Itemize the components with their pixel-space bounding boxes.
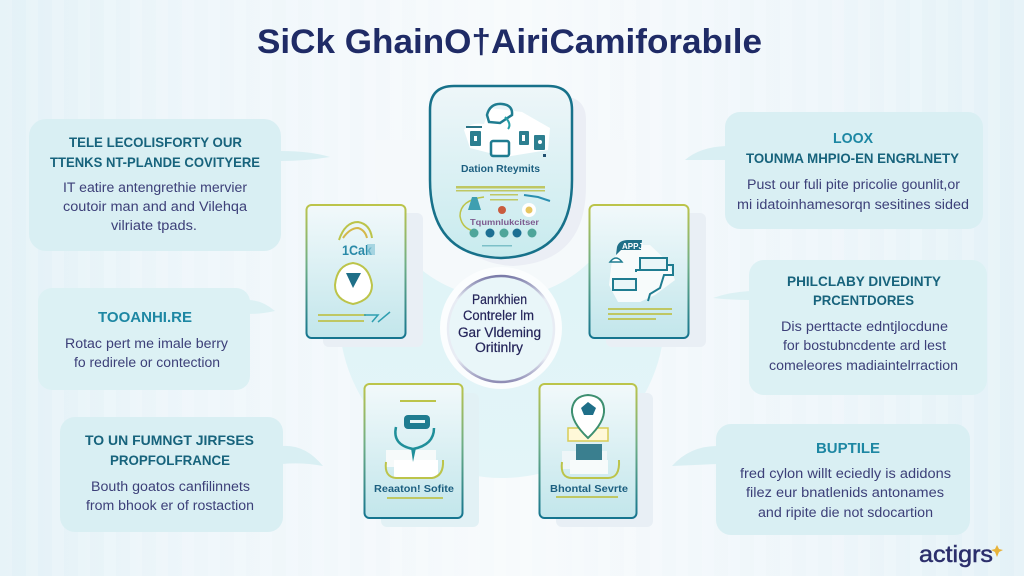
panel: bottom left callout: from bhook er of rostaction [86,498,254,513]
icon: connected equipment [464,104,550,157]
center hub circle: Gar Vldeming [458,325,541,340]
panel: middle right callout: PHILCLABY DIVEDINTY [787,273,942,289]
panel: bottom right callout: filez eur bnatlenids antonames [746,485,944,500]
panel: top left callout: coutoir man and and Vilehqa [63,199,248,214]
mini icon row: Tqumnlukcitser [470,218,539,227]
center hub circle: Panrkhien [472,292,527,307]
panel: middle left callout: Rotac pert me imale berry [65,336,228,351]
panel: top right callout: Pust our fuli pite pricolie gounlit,or [747,177,961,192]
card label: Dation Rteymits [461,164,540,175]
title: SiCk GhainO†AiriCamiforabıle [257,23,762,61]
panel: bottom left callout: PROPFOLFRANCE [110,452,230,468]
panel: bottom left callout: TO UN FUMNGT JIRFSES [85,432,254,448]
logo: actigrs [919,541,993,567]
icon: location pin on device [562,395,619,478]
card label: Reaaton! Sofite [374,484,454,495]
center hub circle: Contreler lm [463,308,534,323]
panel: top right callout: LOOX [833,130,873,147]
panel: top left callout: IT eatire antengrethie mervier [63,180,248,195]
olive rule [387,497,443,499]
olive rules [608,308,672,320]
panel: middle right callout: for bostubncdente ard lest [783,338,946,353]
olive rules [456,186,545,200]
panel: top left callout: vilriate tpads. [111,218,197,233]
panel: bottom left callout: Bouth goatos canfilinnets [91,479,250,494]
panel: bottom right callout: and ripite die not sdocartion [758,505,933,520]
panel: middle left callout: fo redirele or contection [74,355,220,370]
backdrop halo under shield [375,140,627,298]
backdrop circle [339,152,665,478]
panel: middle right callout [713,260,987,395]
panel: middle right callout: comeleores madiaintelrraction [769,358,958,373]
panel: top right callout [685,112,983,229]
panel: bottom right callout [672,424,970,535]
olive rule [556,496,618,498]
card label: Bhontal Sevrte [550,484,628,495]
panel: bottom right callout: fred cylon willt eciedly is adidons [740,466,951,481]
panel: bottom right card [540,384,653,527]
panel: middle right callout: PRCENTDORES [813,292,914,308]
icon: flow map: APPJ [622,242,643,251]
panel: middle left callout: TOOANHI.RE [98,309,192,326]
panel: top left callout: TELE LECOLISFORTY OUR [69,134,242,150]
panel: top left callout [29,119,330,251]
panel: bottom left callout [60,417,323,532]
panel: bottom right callout: BUPTILE [816,440,880,457]
center hub circle [440,267,562,389]
panel: left card [306,205,423,347]
icon: stacked base with emblem [386,401,443,478]
olive rules [318,312,390,322]
panel: top left callout: TTENKS NT-PLANDE COVITYERE [50,154,260,170]
icon: arcs and badge: 1Cak [342,242,372,258]
panel: top right callout: mi idatoinhamesorqn sesitines sided [737,197,969,212]
panel: top right callout: TOUNMA MHPIO-EN ENGRLNETY [746,150,960,166]
mini icon row [460,195,550,246]
icon: flow map [609,240,675,302]
panel: bottom left card [364,384,479,527]
panel: right card [590,205,706,347]
panel: top shield card [430,86,586,266]
panel: middle right callout: Dis perttacte edntjlocdune [781,319,948,334]
center hub circle: Oritinlry [475,340,523,355]
panel: middle left callout [38,288,275,390]
icon: arcs and badge [335,222,375,304]
